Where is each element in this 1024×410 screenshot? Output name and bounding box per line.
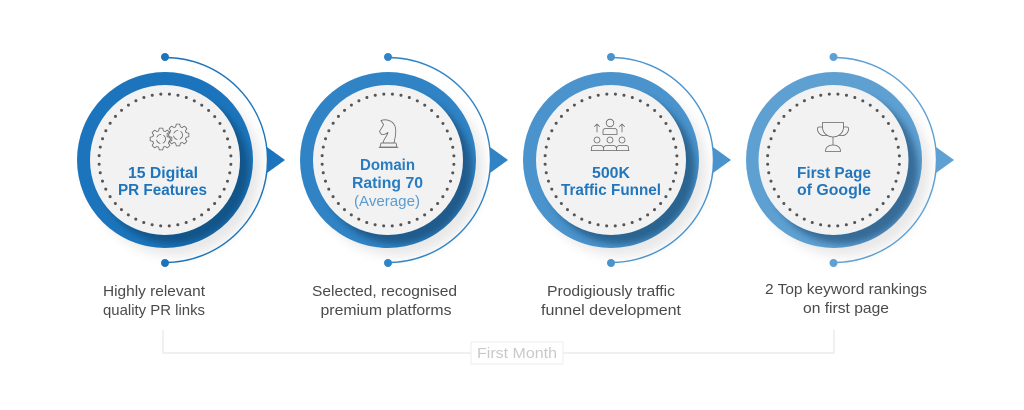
caption 2: Selected, recognised [312,284,457,300]
step 4 arrow [936,147,954,173]
step 3 heading: 500K [592,165,630,182]
timeline label box [471,342,563,364]
step 1 inner disc [90,85,240,235]
caption 3: Prodigiously traffic [547,284,675,300]
step 3 heading: Traffic Funnel [561,182,661,199]
icon: chess knight [379,120,398,148]
step 3 soft shadow [535,84,707,256]
step 3 inner disc [536,85,686,235]
step 1 arrow [267,147,285,173]
caption 1: Highly relevant [103,284,205,300]
step 1 outer arc with end dots [161,53,268,267]
step 3 blue ring [523,72,699,248]
caption 3: funnel development [541,303,681,319]
step 1 dotted ring [95,90,235,230]
step 3: 500K Traffic Funnel [523,53,731,267]
step 1: 15 Digital PR Features [77,53,285,267]
step 4 outer arc with end dots [830,53,936,267]
step 4 blue ring [746,72,922,248]
caption 4: on first page [803,301,889,317]
step 2 arrow [490,147,508,173]
step 2 outer arc with end dots [384,53,491,267]
caption 4: 2 Top keyword rankings [765,282,927,298]
step 4 dotted ring [763,90,904,230]
step 4 heading: of Google [797,182,871,199]
icon: trophy [817,122,849,152]
step 4: First Page of Google [746,53,954,267]
icon: people with arrows [591,119,629,150]
icon: gears [150,124,189,150]
step 2 soft shadow [312,84,484,256]
caption 1: quality PR links [103,303,205,319]
step 2 dotted ring [318,90,458,230]
timeline bracket: First Month [163,330,834,364]
step 2 heading: Rating 70 [352,175,423,192]
caption 2: premium platforms [320,303,452,319]
step 4 inner disc [758,85,908,235]
step 1 heading: 15 Digital [128,165,198,182]
step 2 blue ring [300,72,476,248]
step 3 arrow [713,147,731,173]
step 1 soft shadow [89,84,261,256]
step 2: Domain Rating 70 [300,53,508,267]
step 3 outer arc with end dots [607,53,714,267]
timeline label: First Month [477,346,557,362]
step 2 subheading: (Average) [354,193,420,210]
step 1 blue ring [77,72,253,248]
step 4 heading: First Page [797,165,871,182]
step 1 heading: PR Features [118,182,207,199]
step 4 soft shadow [758,84,930,256]
step 2 heading: Domain [360,157,415,174]
step 2 inner disc [313,85,463,235]
step 3 dotted ring [541,90,681,230]
